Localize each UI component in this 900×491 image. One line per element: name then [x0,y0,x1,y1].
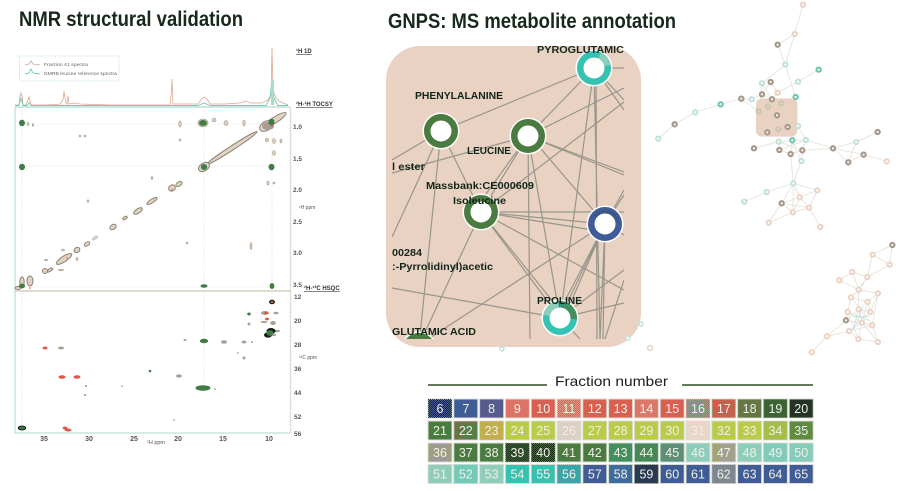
row 3: fractions 36-50: 36 [433,446,447,460]
row 4: fractions 51-65: 54 [510,468,524,482]
row 1: fractions 6-20: 6 [437,402,444,416]
row 4: fractions 51-65: 65 [794,468,808,482]
node labels: l ester [392,162,425,173]
row 3: fractions 36-50: 49 [768,446,782,460]
row 2: fractions 21-35: 28 [614,424,628,438]
axis: 1H ppm bottom scale: 10 [265,436,273,443]
node labels: GLUTAMIC ACID [392,327,476,338]
axis: 1H ppm bottom scale: 35 [40,436,48,443]
node labels: 00284 [392,248,422,259]
axis: 1H ppm right scale: 1.0 [293,124,302,131]
row 4: fractions 51-65: 51 [433,468,447,482]
axis: 1H ppm bottom scale: ¹H ppm [147,440,165,446]
node labels: PROLINE [537,296,582,307]
legend: spectra key: Fraction 41 spectra [44,62,88,68]
row 4: fractions 51-65: 60 [665,468,679,482]
row 2: fractions 21-35: 25 [536,424,550,438]
row 3: fractions 36-50: 47 [717,446,731,460]
upper network nodes [656,2,889,229]
row 1: fractions 6-20: 7 [462,402,469,416]
row 2: fractions 21-35: 22 [459,424,473,438]
row 3: fractions 36-50 [428,443,813,462]
legend grid: fraction colours [428,399,813,484]
row 2: fractions 21-35: 29 [639,424,653,438]
row 3: fractions 36-50: 37 [459,446,473,460]
mini highlighted region [756,98,797,137]
row 4: fractions 51-65: 57 [588,468,602,482]
node labels [392,45,624,338]
row 3: fractions 36-50: 38 [485,446,499,460]
row 1: fractions 6-20: 8 [488,402,495,416]
title: NMR structural validation: NMR structural validation [19,7,243,31]
row 1: fractions 6-20: 13 [614,402,628,416]
row 4: fractions 51-65: 59 [639,468,653,482]
row 1: fractions 6-20: 9 [514,402,521,416]
axis: 13C ppm right scale: 44 [294,390,302,397]
node labels: PYROGLUTAMIC [537,45,624,56]
node: phenylalanine [422,112,460,150]
heading: Fraction number: Fraction number [555,373,668,389]
chart: TOCSY cross peaks [19,118,282,289]
row 3: fractions 36-50: 48 [743,446,757,460]
axis: 13C ppm right scale: 36 [294,366,302,373]
row 3: fractions 36-50: 44 [639,446,653,460]
node: proline [542,300,578,336]
row 3: fractions 36-50: 40 [536,446,550,460]
axis: 13C ppm right scale: 20 [294,318,302,325]
row 2: fractions 21-35: 26 [562,424,576,438]
row 2: fractions 21-35: 24 [510,424,524,438]
row 4: fractions 51-65: 52 [459,468,473,482]
row 3: fractions 36-50: 41 [562,446,576,460]
axis: 1H ppm right scale: 3.0 [293,250,302,257]
row 2: fractions 21-35: 33 [743,424,757,438]
row 1: fractions 6-20: 16 [691,402,705,416]
row 3: fractions 36-50: 43 [614,446,628,460]
network: upper molecular family [656,2,889,229]
axis: 1H ppm bottom scale: 15 [219,436,227,443]
row 4: fractions 51-65: 63 [743,468,757,482]
label: 1H-13C HSQC: ¹H-¹³C HSQC [304,285,340,292]
row 2: fractions 21-35: 21 [433,424,447,438]
row 3: fractions 36-50: 45 [665,446,679,460]
row 2: fractions 21-35: 27 [588,424,602,438]
row 3: fractions 36-50: 46 [691,446,705,460]
axis: 13C ppm right scale: 56 [294,431,302,438]
node labels: LEUCINE [467,146,511,157]
plot frame [15,107,291,433]
panel background [386,46,641,347]
upper network edges [658,5,887,227]
lower network nodes [809,243,894,354]
legend: spectra key: DMRB leucine reference spectra [44,71,117,77]
panel: NMR spectra [15,48,340,446]
node: leucine [510,118,546,154]
label: 1H-1H TOCSY: ¹H-¹H TOCSY [296,101,333,108]
axis: 1H ppm right scale: ¹H ppm [299,205,315,211]
row 1: fractions 6-20: 18 [743,402,757,416]
row 3: fractions 36-50: 50 [794,446,808,460]
row 3: fractions 36-50: 39 [510,446,524,460]
axis: 13C ppm right scale: 52 [294,414,302,421]
axis: 1H ppm bottom scale: 20 [174,436,182,443]
row 4: fractions 51-65: 53 [485,468,499,482]
row 4: fractions 51-65: 64 [768,468,782,482]
row 2: fractions 21-35: 35 [794,424,808,438]
axis: 1H ppm right scale: 1.5 [293,156,302,163]
axis: 13C ppm right scale: 28 [294,342,302,349]
node labels: :-Pyrrolidinyl)acetic [392,262,493,273]
node labels: Massbank:CE000609 [426,181,534,192]
stray nodes below zoom panel [500,322,652,351]
axis: 1H ppm right scale: 2.5 [293,219,302,226]
node labels: Isoleucine [453,196,506,207]
row 4: fractions 51-65: 55 [536,468,550,482]
row 4: fractions 51-65 [428,464,813,484]
label: 1H 1D: ¹H 1D [296,48,312,55]
row 1: fractions 6-20: 17 [717,402,731,416]
row 1: fractions 6-20: 19 [768,402,782,416]
axis: 13C ppm right scale: 12 [294,294,302,301]
row 1: fractions 6-20 [428,399,813,418]
row 4: fractions 51-65: 58 [614,468,628,482]
row 2: fractions 21-35 [428,421,813,440]
row 1: fractions 6-20: 11 [563,402,576,416]
row 4: fractions 51-65: 56 [562,468,576,482]
row 1: fractions 6-20: 14 [639,402,653,416]
node: glutamic acid [404,332,434,339]
title: GNPS MS metabolite annotation: GNPS: MS metabolite annotation [388,10,676,33]
axis: 1H ppm right scale: 3.5 [293,282,302,289]
row 2: fractions 21-35: 23 [485,424,499,438]
lower network teal edges [848,283,870,330]
row 1: fractions 6-20: 12 [588,402,602,416]
lower network edges [812,245,892,352]
row 2: fractions 21-35: 34 [768,424,782,438]
axis: 1H ppm right scale: 2.0 [293,187,302,194]
chart: HSQC peaks [18,300,280,432]
axis: 13C ppm right scale: ¹³C ppm [299,355,317,361]
panel: network zoom [386,45,641,368]
axis: 13C ppm right scale [294,294,317,438]
chart: TOCSY diagonal [15,110,288,289]
node: isoleucine [462,194,500,230]
node labels: PHENYLALANINE [415,91,503,102]
network edges [392,68,624,345]
node: blue unannotated [586,206,624,242]
row 2: fractions 21-35: 30 [665,424,679,438]
row 3: fractions 36-50: 42 [588,446,602,460]
chart: 1H 1D spectrum [15,48,288,106]
node: pyroglutamic acid [576,50,612,86]
row 4: fractions 51-65: 62 [717,468,731,482]
axis: 1H ppm bottom scale [40,436,273,446]
legend: spectra key [20,56,119,81]
row 1: fractions 6-20: 20 [794,402,808,416]
axis: 1H ppm bottom scale: 30 [85,436,93,443]
network: lower molecular family [809,243,894,354]
row 1: fractions 6-20: 10 [536,402,550,416]
row 1: fractions 6-20: 15 [665,402,679,416]
axis: 1H ppm right scale [293,124,315,289]
row 2: fractions 21-35: 32 [717,424,731,438]
row 4: fractions 51-65: 61 [691,468,705,482]
axis: 1H ppm bottom scale: 25 [130,436,138,443]
row 2: fractions 21-35: 31 [691,424,705,438]
